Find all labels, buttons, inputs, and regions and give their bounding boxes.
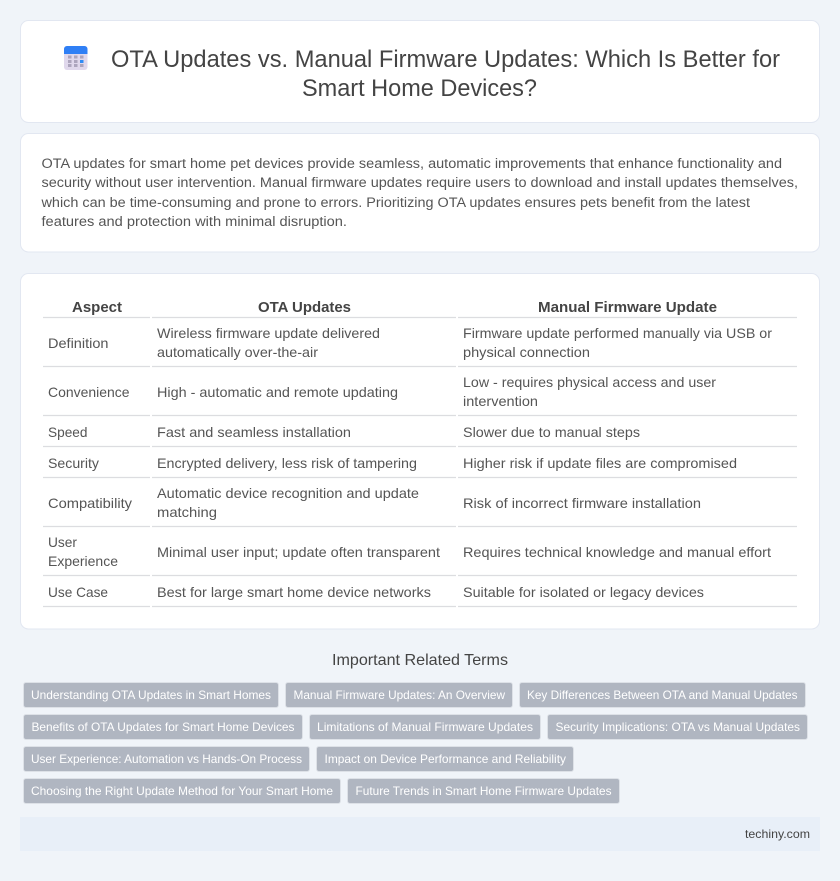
- row: definition: automatically over-the-air: [157, 344, 318, 360]
- text block: summary paragraph: features and protection with minimal disruption.: [42, 214, 347, 230]
- text block: summary paragraph: security without user intervention. Manual firmware updates require users to download and install updates themselves,: [42, 175, 798, 191]
- chip: Security Implications: OTA vs Manual Updates: [556, 720, 800, 734]
- chip: [24, 682, 278, 708]
- row: speed: Speed: [48, 424, 88, 440]
- row: use case: Use Case: [48, 584, 108, 600]
- title: [111, 46, 780, 102]
- row: security: Higher risk if update files are compromised: [463, 455, 737, 471]
- chip: Choosing the Right Update Method for Your Smart Home: [31, 784, 333, 798]
- row: speed: Slower due to manual steps: [463, 424, 640, 440]
- row: compatibility: Compatibility: [48, 495, 132, 511]
- icon: calendar grid: [64, 46, 88, 70]
- row: security: Security: [48, 455, 99, 471]
- row: user experience: [48, 534, 771, 569]
- row: compatibility: Automatic device recognition and update: [157, 485, 419, 501]
- row: user experience: Experience: [48, 553, 118, 569]
- row: security: [48, 455, 737, 471]
- chip: [286, 682, 512, 708]
- chip: Manual Firmware Updates: An Overview: [294, 688, 505, 702]
- row: definition: physical connection: [463, 344, 590, 360]
- row: compatibility: matching: [157, 504, 217, 520]
- chip: Impact on Device Performance and Reliability: [324, 752, 566, 766]
- chip: Understanding OTA Updates in Smart Homes: [31, 688, 271, 702]
- table header row: Manual Firmware Update: [538, 300, 717, 316]
- row: definition: [48, 325, 772, 360]
- table header row: OTA Updates: [258, 300, 351, 316]
- chip: [348, 778, 620, 804]
- footer bar: [20, 817, 820, 851]
- row: speed: Fast and seamless installation: [157, 424, 351, 440]
- row: compatibility: [48, 485, 701, 520]
- row: use case: Best for large smart home device networks: [157, 584, 431, 600]
- heading: important related terms: Important Related Terms: [332, 652, 508, 669]
- row: speed: [48, 424, 640, 440]
- chip: Key Differences Between OTA and Manual Updates: [527, 688, 798, 702]
- panel: related term chips: [24, 682, 808, 804]
- row: security: Encrypted delivery, less risk of tampering: [157, 455, 417, 471]
- chip: [24, 746, 310, 772]
- row: compatibility: Risk of incorrect firmware installation: [463, 495, 701, 511]
- panel: header: [20, 20, 820, 122]
- row: user experience: User: [48, 534, 77, 550]
- panel: comparison table: [20, 274, 820, 629]
- row: definition: Firmware update performed manually via USB or: [463, 325, 772, 341]
- chip: User Experience: Automation vs Hands-On Process: [31, 752, 302, 766]
- row: convenience: High - automatic and remote updating: [157, 384, 398, 400]
- chip: [24, 778, 340, 804]
- row: user experience: Requires technical knowledge and manual effort: [463, 544, 771, 560]
- row: convenience: [48, 374, 716, 409]
- row: convenience: Low - requires physical access and user: [463, 374, 716, 390]
- chip: [316, 746, 574, 772]
- chip: Benefits of OTA Updates for Smart Home Devices: [32, 720, 294, 734]
- panel: summary: [20, 134, 820, 252]
- chip: [310, 714, 540, 740]
- row: convenience: Convenience: [48, 384, 130, 400]
- chip: Future Trends in Smart Home Firmware Updates: [356, 784, 612, 798]
- table header row: [72, 300, 717, 316]
- text block: summary paragraph: which can be time-consuming and prone to errors. Prioritizing OTA updates ensures pets benefit from the latest: [40, 195, 750, 211]
- row: user experience: Minimal user input; update often transparent: [157, 544, 440, 560]
- table header row: Aspect: [72, 300, 122, 316]
- footer bar: techiny.com: [745, 827, 810, 841]
- chip: [520, 682, 806, 708]
- row: convenience: intervention: [463, 393, 538, 409]
- row: definition: Definition: [48, 335, 108, 351]
- row: definition: Wireless firmware update delivered: [157, 325, 380, 341]
- row: use case: [48, 584, 704, 600]
- chip: [24, 714, 302, 740]
- chip: Limitations of Manual Firmware Updates: [317, 720, 533, 734]
- row: use case: Suitable for isolated or legacy devices: [463, 584, 704, 600]
- chip: [548, 714, 808, 740]
- title: Smart Home Devices?: [302, 75, 537, 102]
- text block: summary paragraph: [40, 156, 798, 230]
- text block: summary paragraph: OTA updates for smart home pet devices provide seamless, automatic improvements that enhance functionality and: [42, 156, 782, 172]
- title: OTA Updates vs. Manual Firmware Updates: Which Is Better for: [111, 46, 780, 73]
